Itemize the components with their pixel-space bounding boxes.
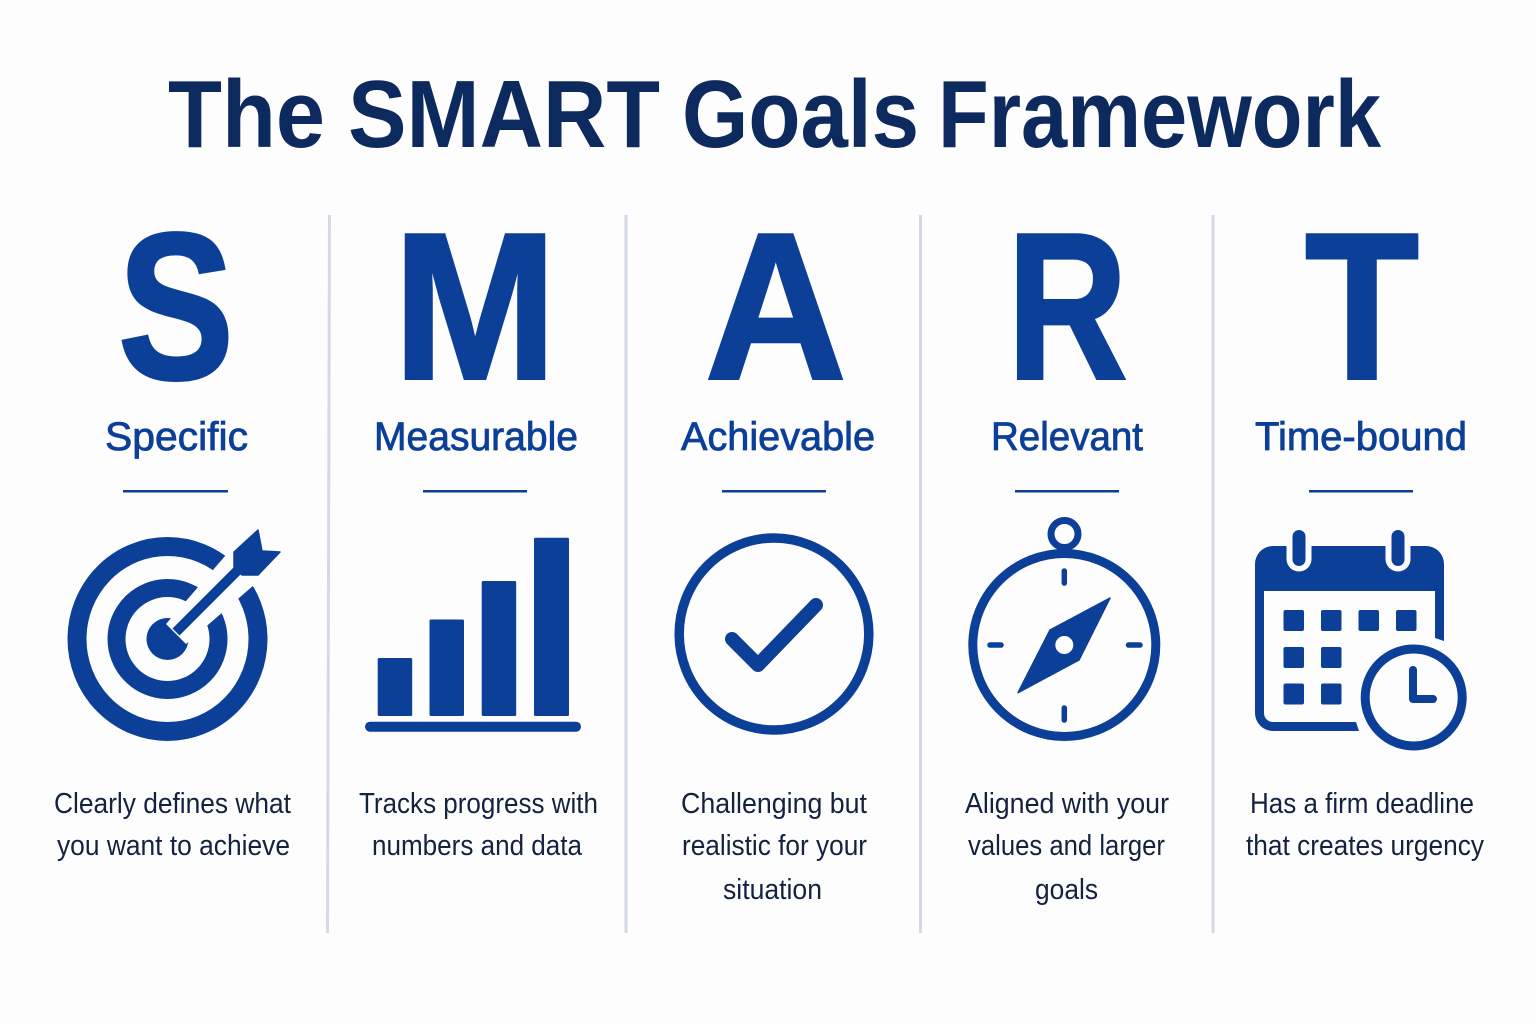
description: Achievable: [681, 788, 867, 906]
panel: Measurable: [359, 190, 598, 862]
heading: Relevant: Relevant: [991, 415, 1143, 459]
icon: target with arrow: [77, 530, 280, 732]
description: Specific: [54, 788, 291, 862]
panel: Relevant: [965, 190, 1169, 906]
icon: compass: [973, 520, 1156, 736]
title: [168, 61, 1382, 168]
heading: Measurable: Measurable: [374, 415, 578, 459]
title: Framework: [938, 61, 1382, 168]
description: Time-bound: [1246, 788, 1484, 862]
description: Measurable: numbers and data: [372, 830, 583, 862]
icon: calendar with clock: [1255, 536, 1462, 746]
description: Measurable: [359, 788, 598, 862]
description: Relevant: goals: [1035, 874, 1098, 906]
description: Specific: you want to achieve: [57, 830, 290, 862]
description: Specific: Clearly defines what: [54, 788, 291, 820]
description: Relevant: Aligned with your: [965, 788, 1169, 820]
heading: Time-bound: Time-bound: [1255, 415, 1467, 459]
description: Time-bound: Has a firm deadline: [1250, 788, 1474, 820]
letter R: R: [1007, 190, 1128, 424]
letter T: T: [1305, 190, 1419, 424]
description: Achievable: situation: [723, 874, 822, 906]
title: The: [168, 61, 325, 168]
panel: Achievable: [679, 190, 875, 906]
description: Relevant: [965, 788, 1169, 906]
title: Goals: [682, 61, 919, 168]
letter S: S: [118, 190, 234, 424]
icon: check mark in circle: [679, 538, 869, 730]
icon: bar chart: [365, 538, 581, 732]
letter A: A: [705, 190, 846, 424]
title: SMART: [348, 61, 660, 168]
heading: Specific: Specific: [105, 415, 248, 459]
panel: Time-bound: [1246, 190, 1484, 862]
panel: Specific: [54, 190, 291, 862]
description: Measurable: Tracks progress with: [359, 788, 598, 820]
description: Time-bound: that creates urgency: [1246, 830, 1484, 862]
letter M: M: [393, 190, 557, 424]
description: Relevant: values and larger: [968, 830, 1165, 862]
heading: Achievable: Achievable: [681, 415, 875, 459]
description: Achievable: realistic for your: [682, 830, 867, 862]
description: Achievable: Challenging but: [681, 788, 867, 820]
